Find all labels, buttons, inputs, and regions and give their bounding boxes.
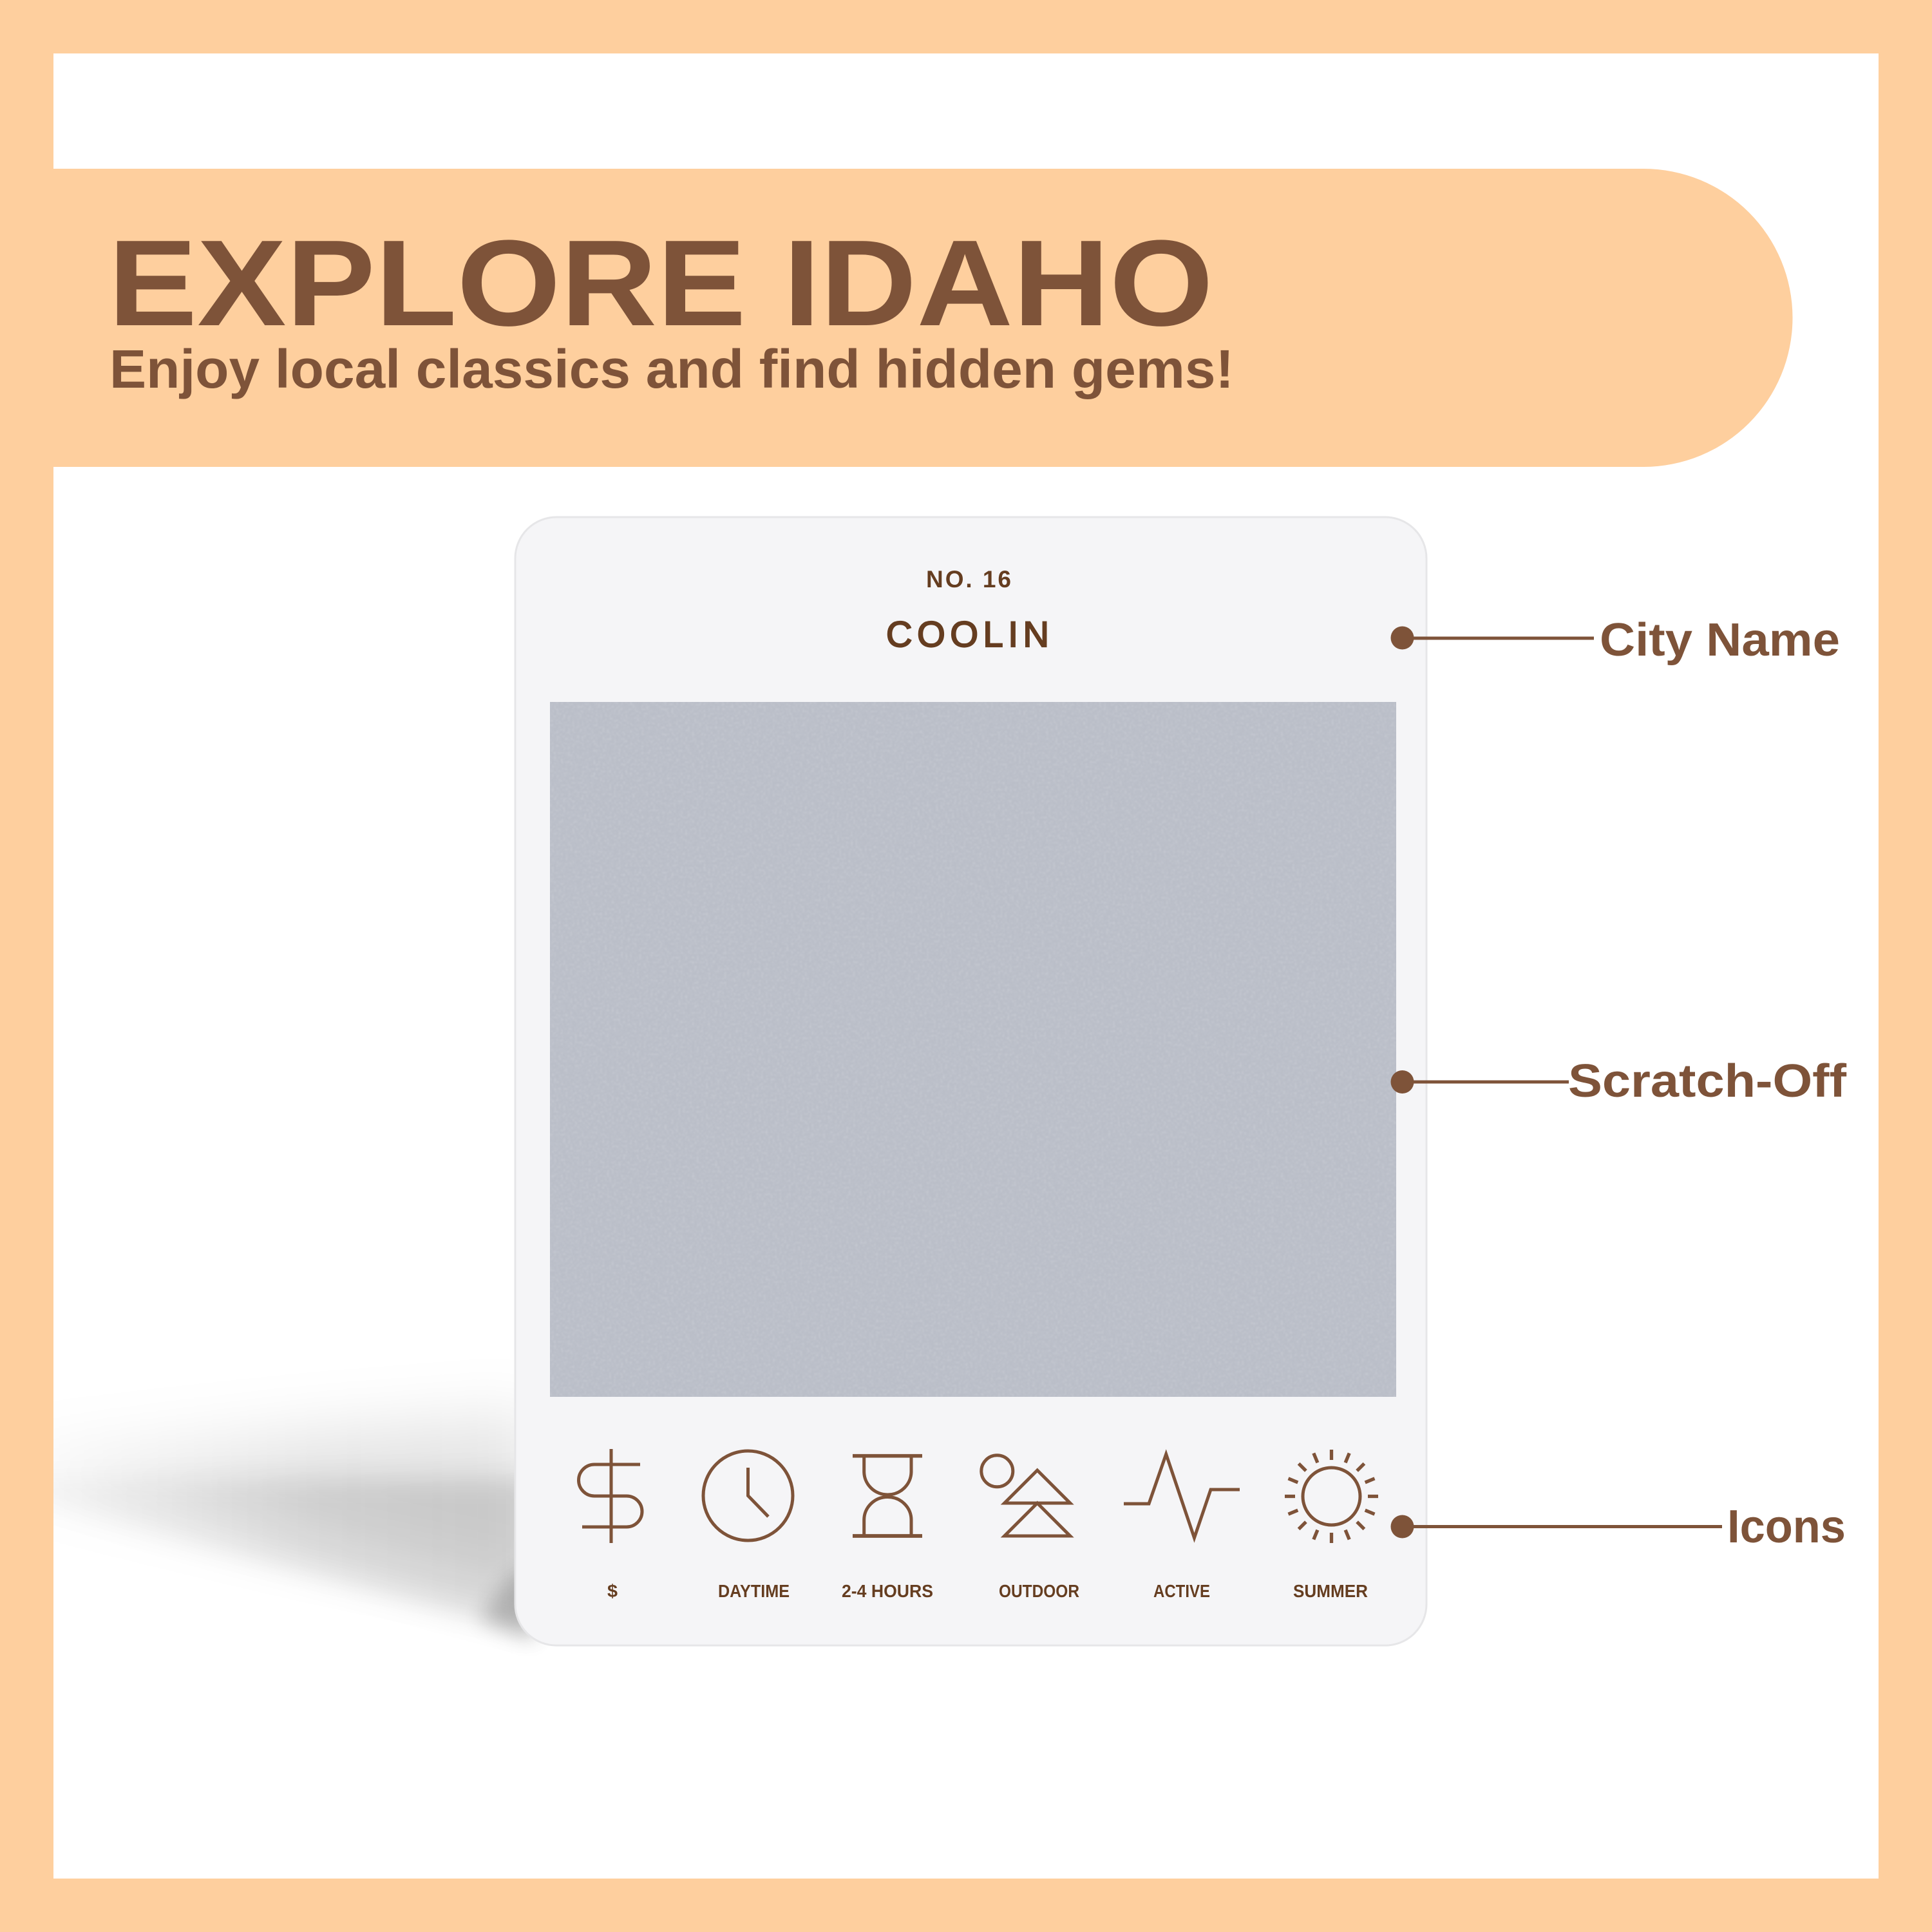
- icon: hourglass: [853, 1456, 922, 1536]
- city name: COOLIN: [886, 614, 1049, 654]
- icon: sun: [1285, 1450, 1378, 1543]
- icon caption: price: $: [607, 1581, 618, 1601]
- card number: NO. 16: [926, 566, 1011, 592]
- card: [515, 517, 1426, 1645]
- callout: icons: Icons: [1727, 1501, 1846, 1553]
- icon caption: summer: SUMMER: [1293, 1581, 1368, 1601]
- scratch-off panel: [550, 702, 1396, 1397]
- icon caption: active: ACTIVE: [1153, 1581, 1210, 1601]
- callout: city name: City Name: [1600, 614, 1840, 666]
- icon caption: duration: 2-4 HOURS: [842, 1581, 933, 1601]
- icon: dollar: [578, 1449, 642, 1543]
- header banner: [53, 169, 1793, 467]
- callout: city name: [1391, 614, 1840, 666]
- icon caption: daytime: DAYTIME: [718, 1581, 790, 1601]
- icon: outdoor: [981, 1455, 1070, 1536]
- icon caption: outdoor: OUTDOOR: [999, 1581, 1079, 1601]
- icon: activity: [1124, 1454, 1240, 1538]
- title: EXPLORE IDAHO: [108, 215, 1213, 352]
- callout: icons: [1391, 1501, 1846, 1553]
- card shadow: [19, 1414, 535, 1641]
- icon: clock: [703, 1451, 793, 1540]
- callout: scratch-off: Scratch-Off: [1568, 1056, 1847, 1107]
- subtitle: Enjoy local classics and find hidden gems!: [109, 339, 1234, 399]
- callout: scratch-off: [1391, 1056, 1847, 1107]
